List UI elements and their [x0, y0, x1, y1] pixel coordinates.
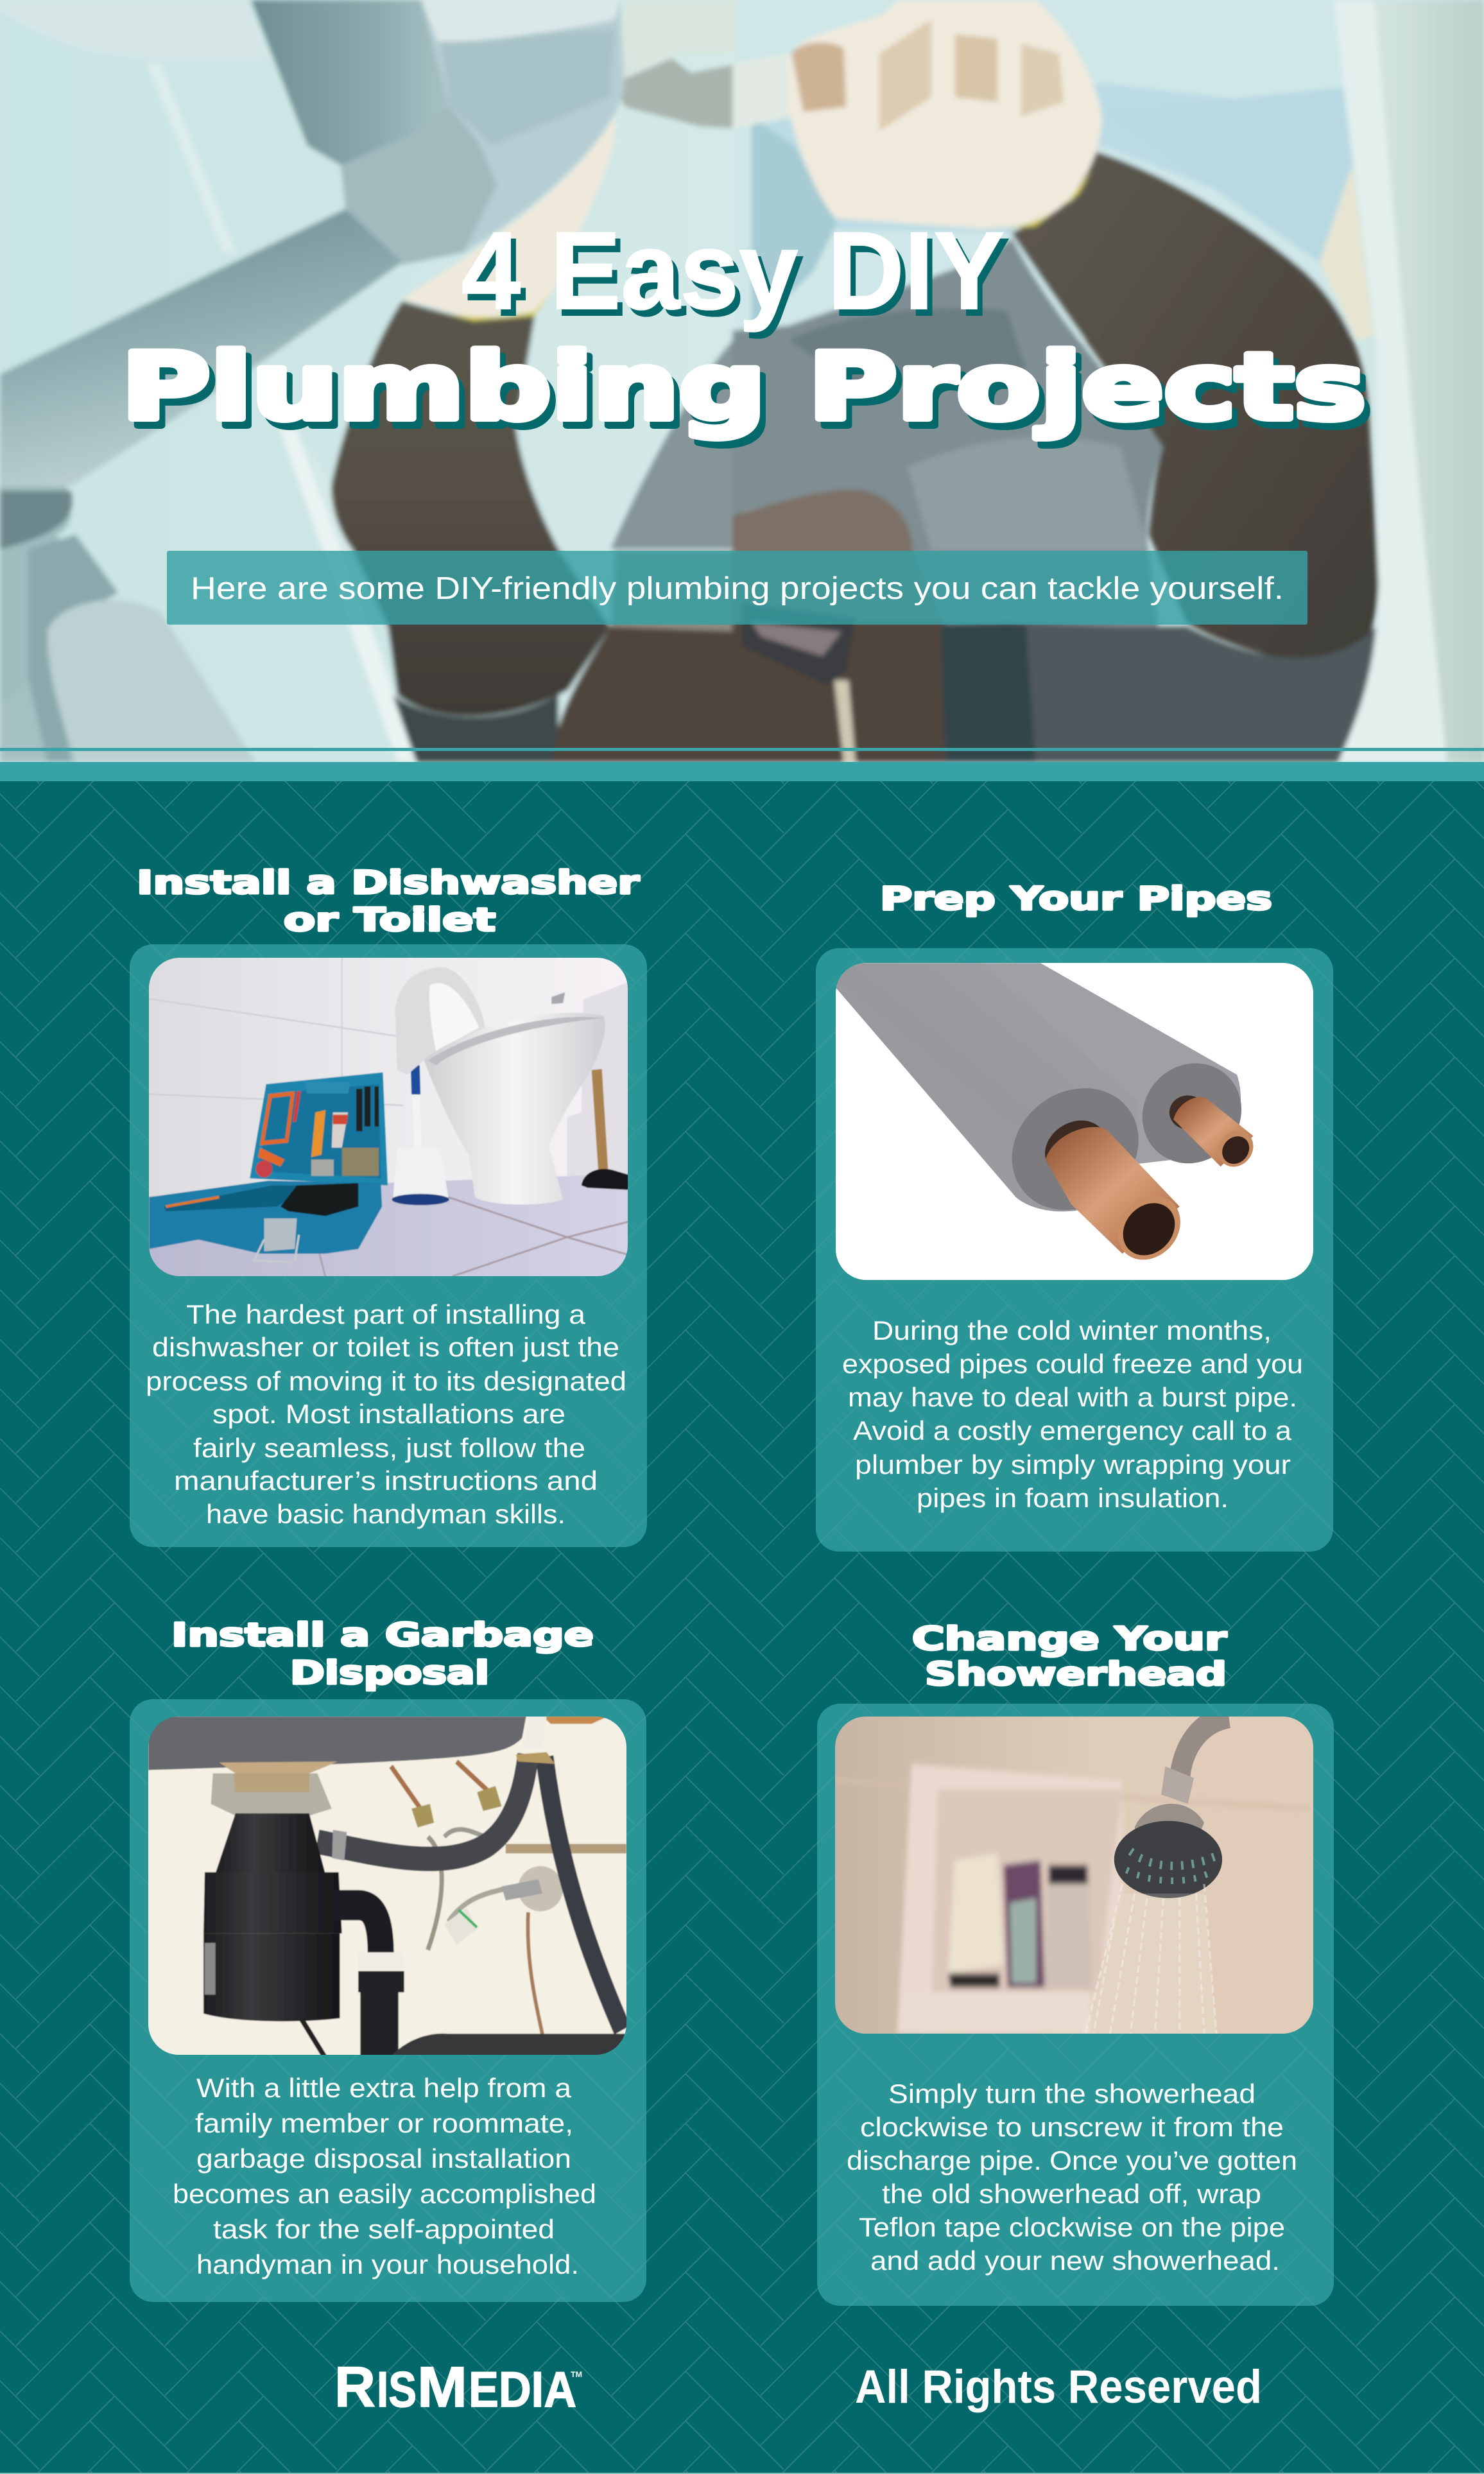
- heading: dishwasher: Install a Dishwasher: [137, 864, 639, 901]
- photo: foam insulated copper pipes: [832, 957, 1319, 1286]
- subtitle banner: Here are some DIY-friendly plumbing projects you can tackle yourself.: [191, 571, 1284, 606]
- heading: disposal: Install a Garbage: [171, 1616, 594, 1654]
- body text: showerhead: discharge pipe. Once you’ve gotten: [847, 2145, 1297, 2176]
- heading: dishwasher: or Toilet: [284, 901, 496, 939]
- panel: install a dishwasher or toilet: [130, 864, 647, 1547]
- body text: disposal: handyman in your household.: [196, 2249, 579, 2279]
- heading: disposal: Disposal: [290, 1654, 489, 1691]
- heading: dishwasher: [137, 864, 639, 939]
- hero divider line: [0, 748, 1484, 751]
- body text: pipes: may have to deal with a burst pipe.: [848, 1382, 1297, 1412]
- body text: dishwasher: dishwasher or toilet is often just the: [152, 1332, 619, 1362]
- title: [121, 209, 1372, 447]
- body text: pipes: [842, 1315, 1303, 1513]
- logo: RISMedia: EDIA: [469, 2361, 576, 2418]
- heading: showerhead: Change Your: [912, 1620, 1227, 1657]
- body text: showerhead: the old showerhead off, wrap: [882, 2179, 1261, 2209]
- logo: RISMedia: R: [334, 2355, 375, 2419]
- body text: dishwasher: The hardest part of installing a: [186, 1299, 586, 1329]
- body text: dishwasher: [146, 1299, 626, 1529]
- logo: RISMedia: TM: [571, 2370, 582, 2379]
- heading: showerhead: [912, 1620, 1227, 1693]
- photo: showerhead with water: [832, 1712, 1319, 2037]
- body text: dishwasher: manufacturer’s instructions and: [174, 1466, 598, 1496]
- body text: pipes: Avoid a costly emergency call to a: [853, 1415, 1292, 1446]
- body text: showerhead: and add your new showerhead.: [870, 2245, 1280, 2276]
- title line 1 shadow: 4 Easy DIY: [467, 216, 1010, 339]
- title line 2 shadow: Plumbing Projects: [127, 340, 1372, 447]
- card background: [130, 944, 647, 1547]
- logo: RISMedia: [334, 2355, 582, 2419]
- heading: disposal: [171, 1616, 594, 1691]
- body text: disposal: With a little extra help from a: [196, 2073, 572, 2103]
- body text: disposal: [173, 2073, 596, 2279]
- background: teal herringbone: [0, 762, 1484, 2474]
- footer: all rights reserved: All Rights Reserved: [855, 2361, 1262, 2413]
- body text: disposal: becomes an easily accomplished: [173, 2179, 596, 2209]
- panel: install a garbage disposal: [130, 1616, 646, 2302]
- hero photo: plumber under sink: [0, 0, 1484, 762]
- body text: showerhead: [847, 2079, 1297, 2276]
- body text: dishwasher: fairly seamless, just follow the: [193, 1433, 585, 1463]
- body text: disposal: family member or roommate,: [195, 2108, 573, 2138]
- logo: RISMedia: M: [417, 2355, 467, 2419]
- card background: [130, 1699, 646, 2302]
- hero divider band: [0, 762, 1484, 781]
- body text: showerhead: clockwise to unscrew it from the: [860, 2112, 1284, 2142]
- body text: showerhead: Simply turn the showerhead: [888, 2079, 1255, 2109]
- body text: dishwasher: process of moving it to its designated: [146, 1366, 626, 1396]
- heading: showerhead: Showerhead: [925, 1656, 1227, 1693]
- panel: change your showerhead: [817, 1620, 1334, 2306]
- body text: dishwasher: spot. Most installations are: [212, 1399, 565, 1429]
- heading: pipes: Prep Your Pipes: [880, 880, 1272, 917]
- body text: disposal: garbage disposal installation: [196, 2143, 571, 2174]
- body text: disposal: task for the self-appointed: [213, 2214, 555, 2244]
- card background: [816, 948, 1333, 1552]
- title line 2: Plumbing Projects: [121, 333, 1366, 440]
- card background: [817, 1704, 1334, 2306]
- body text: pipes: exposed pipes could freeze and you: [842, 1349, 1303, 1379]
- body text: dishwasher: have basic handyman skills.: [206, 1499, 565, 1529]
- logo: RISMedia: IS: [377, 2361, 417, 2418]
- panel: prep your pipes: [816, 880, 1333, 1552]
- body text: pipes: During the cold winter months,: [872, 1315, 1272, 1345]
- title line 1: 4 Easy DIY: [462, 209, 1005, 333]
- photo: garbage disposal under sink: [137, 1709, 637, 2063]
- photo: toolbox and toilet: [149, 958, 628, 1276]
- body text: pipes: plumber by simply wrapping your: [855, 1449, 1291, 1480]
- subtitle banner: [167, 551, 1307, 625]
- body text: pipes: pipes in foam insulation.: [917, 1483, 1229, 1513]
- body text: showerhead: Teflon tape clockwise on the pipe: [859, 2212, 1285, 2242]
